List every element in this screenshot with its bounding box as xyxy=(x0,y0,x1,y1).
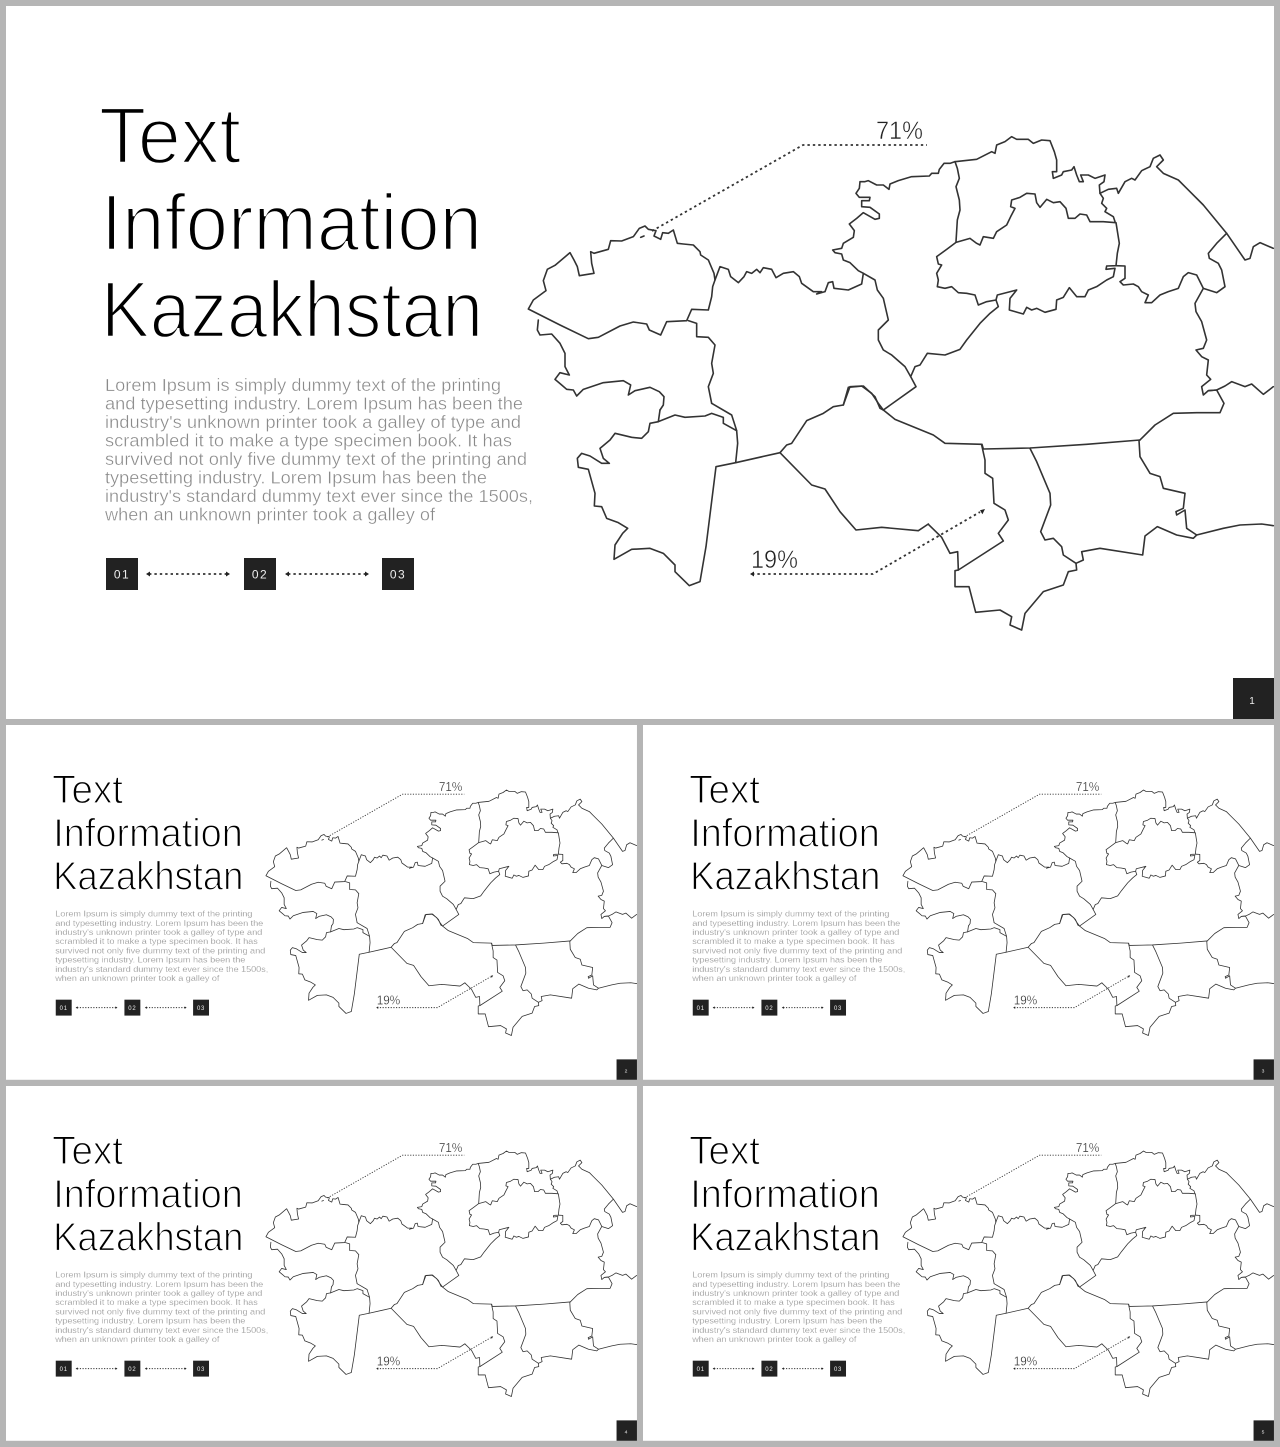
step flow 01 02 03: 03 xyxy=(390,568,406,582)
page number: 2 xyxy=(625,1068,628,1074)
callout: 71% xyxy=(327,1141,464,1198)
body text xyxy=(691,1270,905,1344)
body text: typesetting industry. Lorem Ipsum has been the xyxy=(105,468,487,488)
step flow 01 02 03: 03 xyxy=(834,1006,842,1012)
title: Text xyxy=(689,1129,760,1173)
step flow 01 02 03: 03 xyxy=(197,1006,205,1012)
body text: when an unknown printer took a galley of xyxy=(691,1334,857,1344)
callout: 71% xyxy=(327,780,464,837)
body text: scrambled it to make a type specimen book. It has xyxy=(692,936,895,946)
callout: 71%: 71% xyxy=(876,117,923,145)
step flow 01 02 03: 03 xyxy=(197,1367,205,1373)
body text: scrambled it to make a type specimen book. It has xyxy=(55,936,258,946)
body text: typesetting industry. Lorem Ipsum has been the xyxy=(55,955,246,965)
body text xyxy=(54,909,268,983)
callout: 71% xyxy=(652,117,927,231)
body text xyxy=(104,375,533,524)
body text: Lorem Ipsum is simply dummy text of the printing xyxy=(55,909,252,919)
page number: 4 xyxy=(625,1429,628,1435)
panel: thumbnail slide 4 xyxy=(6,1086,637,1441)
title: Kazakhstan xyxy=(690,855,880,899)
step flow 01 02 03 xyxy=(56,1361,209,1377)
callout: 19% xyxy=(376,975,493,1009)
callout: 71% xyxy=(964,780,1101,837)
step flow 01 02 03: 02 xyxy=(252,568,268,582)
body text: when an unknown printer took a galley of xyxy=(54,1334,220,1344)
title: Kazakhstan xyxy=(53,855,243,899)
body text: industry's standard dummy text ever since the 1500s, xyxy=(55,1325,268,1335)
title: Text xyxy=(99,91,241,180)
step flow 01 02 03: 02 xyxy=(765,1006,773,1012)
body text: industry's unknown printer took a galley of type and xyxy=(55,1288,262,1298)
callout: 19% xyxy=(1013,1336,1130,1370)
callout: 71%: 71% xyxy=(439,1141,462,1155)
body text: typesetting industry. Lorem Ipsum has been the xyxy=(55,1316,246,1326)
body text: industry's standard dummy text ever since the 1500s, xyxy=(105,486,533,506)
page number xyxy=(1233,678,1274,719)
map xyxy=(903,790,1274,1035)
callout: 71%: 71% xyxy=(1076,780,1099,794)
step flow 01 02 03: 01 xyxy=(60,1367,68,1373)
body text: scrambled it to make a type specimen book. It has xyxy=(55,1297,258,1307)
body text: survived not only five dummy text of the printing and xyxy=(692,1306,902,1316)
step flow 01 02 03 xyxy=(693,1000,846,1016)
callout: 19% xyxy=(1013,975,1130,1009)
title: Text xyxy=(52,768,123,812)
page number: 5 xyxy=(1262,1429,1265,1435)
panel: thumbnail slide 5 xyxy=(643,1086,1274,1441)
body text: survived not only five dummy text of the printing and xyxy=(692,945,902,955)
panel: main slide xyxy=(6,6,1274,719)
title: Kazakhstan xyxy=(101,265,483,354)
body text: Lorem Ipsum is simply dummy text of the printing xyxy=(692,1270,889,1280)
body text: survived not only five dummy text of the printing and xyxy=(55,945,265,955)
callout: 71%: 71% xyxy=(439,780,462,794)
title: Text xyxy=(52,1129,123,1173)
step flow 01 02 03: 02 xyxy=(128,1006,136,1012)
body text xyxy=(691,909,905,983)
title xyxy=(689,1129,880,1260)
step flow 01 02 03 xyxy=(56,1000,209,1016)
body text: industry's unknown printer took a galley of type and xyxy=(55,927,262,937)
body text: Lorem Ipsum is simply dummy text of the printing xyxy=(105,375,501,395)
step flow 01 02 03: 02 xyxy=(765,1367,773,1373)
body text: Lorem Ipsum is simply dummy text of the printing xyxy=(692,909,889,919)
step flow 01 02 03: 01 xyxy=(697,1367,705,1373)
map xyxy=(266,1151,637,1396)
title: Kazakhstan xyxy=(690,1216,880,1260)
map xyxy=(266,790,637,1035)
panel: thumbnail slide 2 xyxy=(6,725,637,1080)
callout: 19%: 19% xyxy=(377,994,400,1008)
body text: industry's standard dummy text ever since the 1500s, xyxy=(55,964,268,974)
title: Information xyxy=(690,811,880,855)
title: Text xyxy=(689,768,760,812)
body text: and typesetting industry. Lorem Ipsum has been the xyxy=(692,1279,900,1289)
page number xyxy=(1254,1420,1274,1441)
body text: industry's unknown printer took a galley of type and xyxy=(105,412,521,432)
body text: survived not only five dummy text of the printing and xyxy=(55,1306,265,1316)
step flow 01 02 03: 01 xyxy=(60,1006,68,1012)
panel: thumbnail slide 3 xyxy=(643,725,1274,1080)
callout: 19%: 19% xyxy=(377,1355,400,1369)
step flow 01 02 03: 02 xyxy=(128,1367,136,1373)
title: Information xyxy=(53,1172,243,1216)
page number xyxy=(1254,1059,1274,1080)
body text: Lorem Ipsum is simply dummy text of the printing xyxy=(55,1270,252,1280)
title xyxy=(99,91,483,354)
step flow 01 02 03: 01 xyxy=(114,568,130,582)
body text: survived not only five dummy text of the printing and xyxy=(105,449,527,469)
body text: typesetting industry. Lorem Ipsum has been the xyxy=(692,955,883,965)
step flow 01 02 03: 03 xyxy=(834,1367,842,1373)
callout: 19%: 19% xyxy=(1014,994,1037,1008)
title xyxy=(689,768,880,899)
title xyxy=(52,768,243,899)
map xyxy=(903,1151,1274,1396)
body text: typesetting industry. Lorem Ipsum has been the xyxy=(692,1316,883,1326)
body text: when an unknown printer took a galley of xyxy=(54,973,220,983)
title: Kazakhstan xyxy=(53,1216,243,1260)
callout: 71%: 71% xyxy=(1076,1141,1099,1155)
page number xyxy=(617,1059,637,1080)
callout: 71% xyxy=(964,1141,1101,1198)
body text: scrambled it to make a type specimen book. It has xyxy=(105,430,512,450)
page number: 3 xyxy=(1262,1068,1265,1074)
step flow 01 02 03: 01 xyxy=(697,1006,705,1012)
body text: and typesetting industry. Lorem Ipsum has been the xyxy=(55,1279,263,1289)
callout: 19%: 19% xyxy=(751,546,798,574)
body text: industry's standard dummy text ever since the 1500s, xyxy=(692,1325,905,1335)
body text: when an unknown printer took a galley of xyxy=(691,973,857,983)
map of Kazakhstan xyxy=(528,137,1273,630)
body text: and typesetting industry. Lorem Ipsum has been the xyxy=(105,394,523,414)
page number xyxy=(617,1420,637,1441)
step flow 01 02 03 xyxy=(693,1361,846,1377)
callout: 19% xyxy=(376,1336,493,1370)
callout: 19%: 19% xyxy=(1014,1355,1037,1369)
body text: and typesetting industry. Lorem Ipsum has been the xyxy=(692,918,900,928)
body text: industry's unknown printer took a galley of type and xyxy=(692,1288,899,1298)
title: Information xyxy=(53,811,243,855)
callout: 19% xyxy=(750,509,985,576)
page number: 1 xyxy=(1249,696,1255,707)
body text: industry's standard dummy text ever since the 1500s, xyxy=(692,964,905,974)
body text: when an unknown printer took a galley of xyxy=(104,504,435,524)
body text: and typesetting industry. Lorem Ipsum has been the xyxy=(55,918,263,928)
body text: scrambled it to make a type specimen book. It has xyxy=(692,1297,895,1307)
body text: industry's unknown printer took a galley of type and xyxy=(692,927,899,937)
title: Information xyxy=(101,178,482,267)
title xyxy=(52,1129,243,1260)
body text xyxy=(54,1270,268,1344)
title: Information xyxy=(690,1172,880,1216)
step flow 01 02 03 xyxy=(106,558,414,590)
